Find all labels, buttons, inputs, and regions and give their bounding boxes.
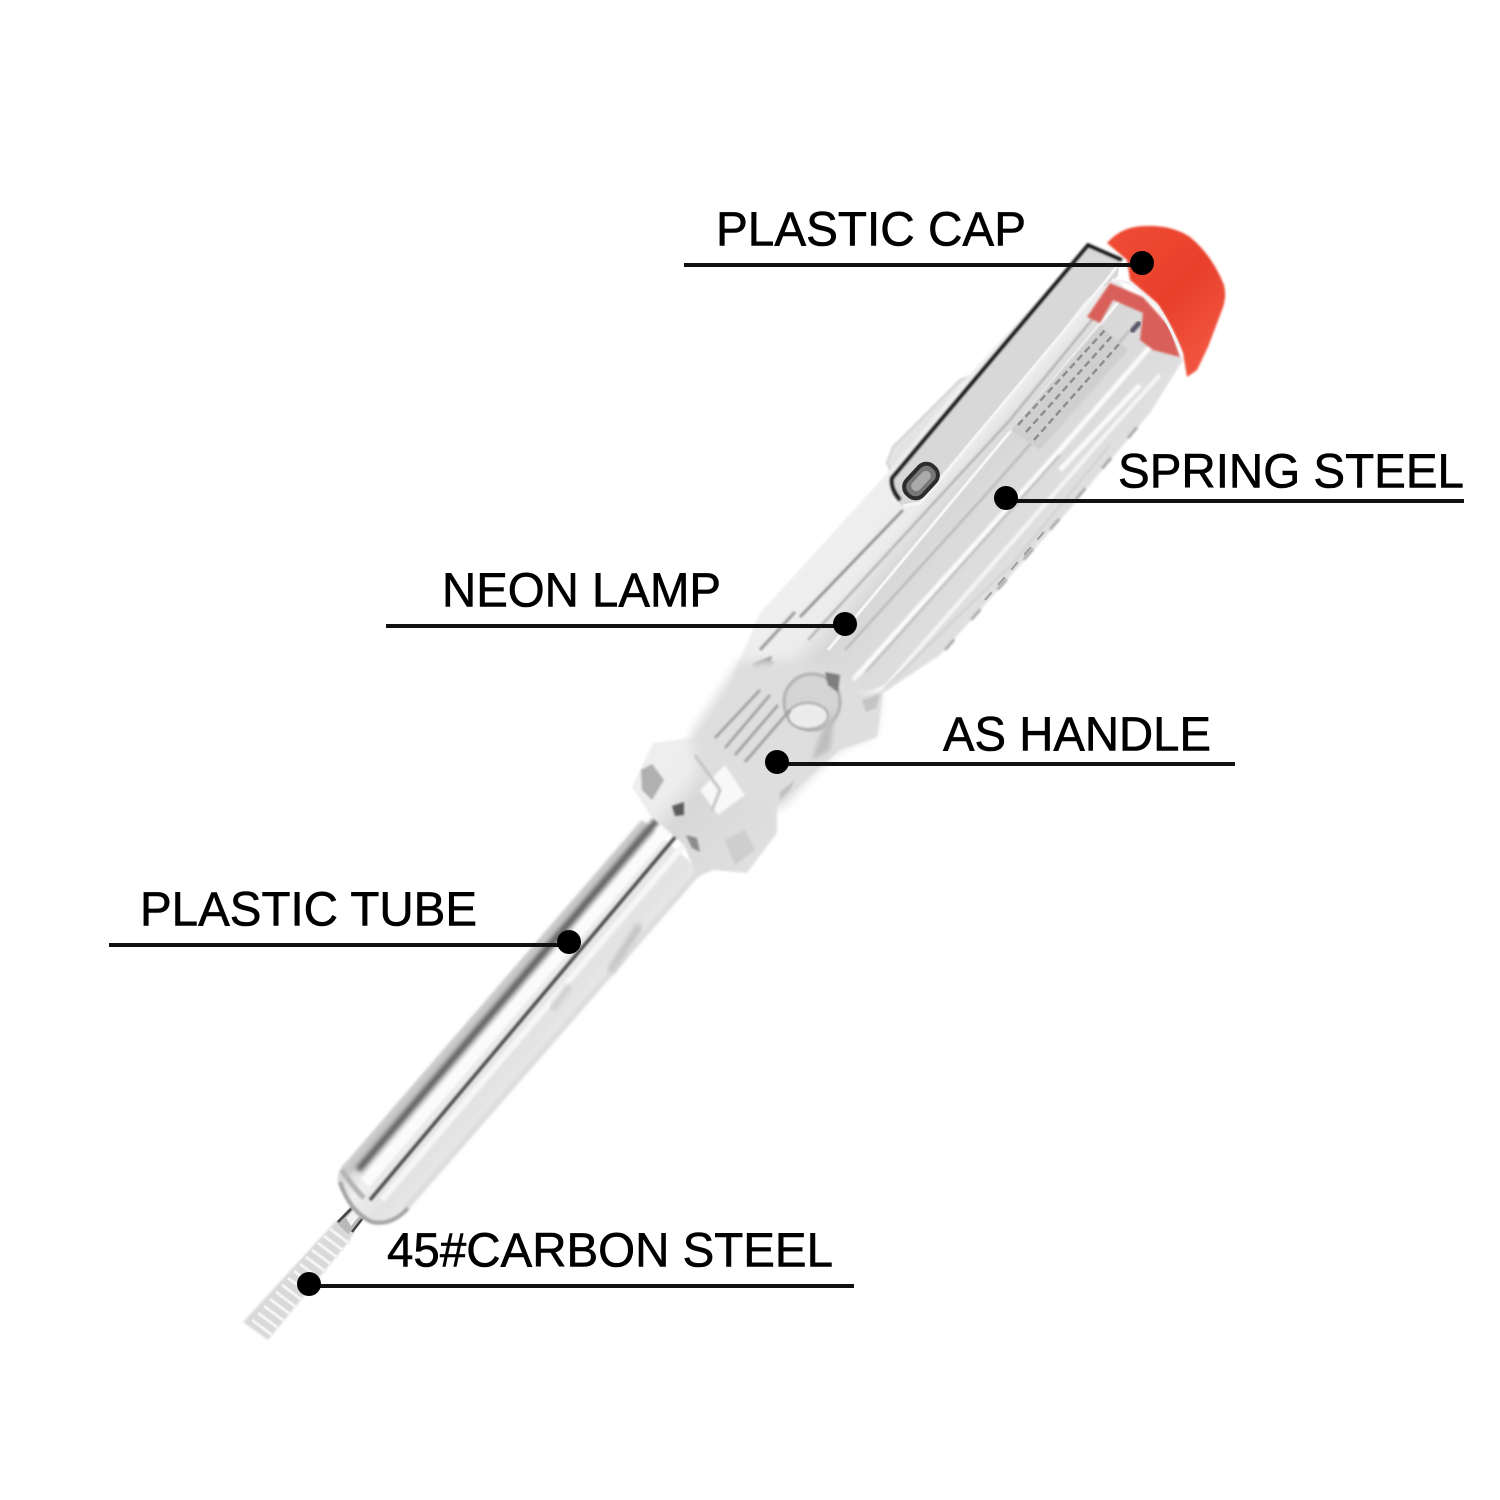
- label: plastic cap: [684, 204, 1154, 275]
- label: plastic cap: PLASTIC CAP: [716, 204, 1026, 256]
- label: plastic tube: PLASTIC TUBE: [140, 884, 477, 936]
- label: spring steel: SPRING STEEL: [1118, 446, 1464, 498]
- label: plastic tube: [109, 884, 581, 954]
- plastic cap: [1087, 226, 1225, 377]
- label: neon lamp: NEON LAMP: [442, 564, 721, 618]
- illustration: voltage tester pen: [243, 226, 1225, 1340]
- pocket clip: [892, 245, 1122, 507]
- label: 45# carbon steel: 45#CARBON STEEL: [387, 1224, 833, 1278]
- plastic tube: [338, 820, 702, 1223]
- tip: carbon steel blade: [243, 1198, 370, 1340]
- label: 45# carbon steel: [297, 1224, 854, 1296]
- label: as handle: [765, 708, 1235, 774]
- label: as handle: AS HANDLE: [943, 708, 1211, 762]
- handle body: [632, 245, 1183, 877]
- label: neon lamp: [386, 564, 857, 636]
- label: spring steel: [994, 446, 1464, 510]
